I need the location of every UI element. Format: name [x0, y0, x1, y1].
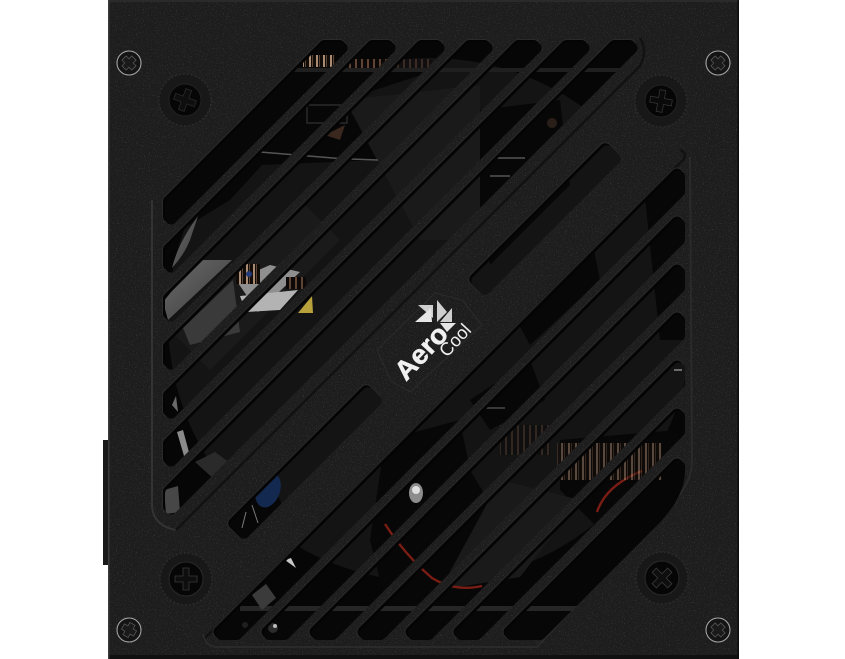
fan disc: [168, 58, 692, 582]
internals: fan and components seen through the vent slots: [150, 30, 700, 645]
logo plate: [377, 293, 482, 392]
logo: AeroCool: [388, 300, 475, 386]
slot rims: [169, 46, 677, 632]
logo icon: pinwheel triangles: [415, 300, 456, 332]
cross bars: [290, 68, 635, 72]
red wires: [385, 471, 642, 588]
icon: recessed fan screw top left: [159, 74, 211, 126]
metal parts and copper coil: [236, 265, 300, 312]
icon: recessed fan screw top right: [635, 75, 687, 127]
icon: small corner screw top left: [117, 51, 141, 75]
blue capacitor: [256, 476, 281, 508]
grey blade highlights: [163, 216, 232, 320]
icon: recessed fan screw bottom left: [160, 553, 212, 605]
logo wordmark: Aero: Aero: [388, 319, 454, 386]
silver screw: [409, 483, 423, 503]
small parts: [285, 558, 296, 568]
dark gaps between blades: [190, 72, 685, 582]
copper fins lower: [557, 443, 662, 480]
slot shadow edges: [169, 46, 677, 632]
icon: small corner screw bottom right: [706, 618, 730, 642]
capacitor lines: [260, 152, 525, 176]
icon: small corner screw bottom left: [117, 618, 141, 642]
copper fins top: [303, 55, 335, 67]
logo wordmark: Cool: Cool: [435, 319, 475, 361]
embossed vent frame: [152, 38, 692, 647]
blade shading: [352, 112, 572, 588]
panel: chassis: [108, 0, 739, 659]
side connector tab: [103, 440, 109, 565]
icon: recessed fan screw bottom right: [636, 552, 688, 604]
icon: small corner screw top right: [706, 51, 730, 75]
illustration: power supply fan side: [103, 0, 739, 659]
